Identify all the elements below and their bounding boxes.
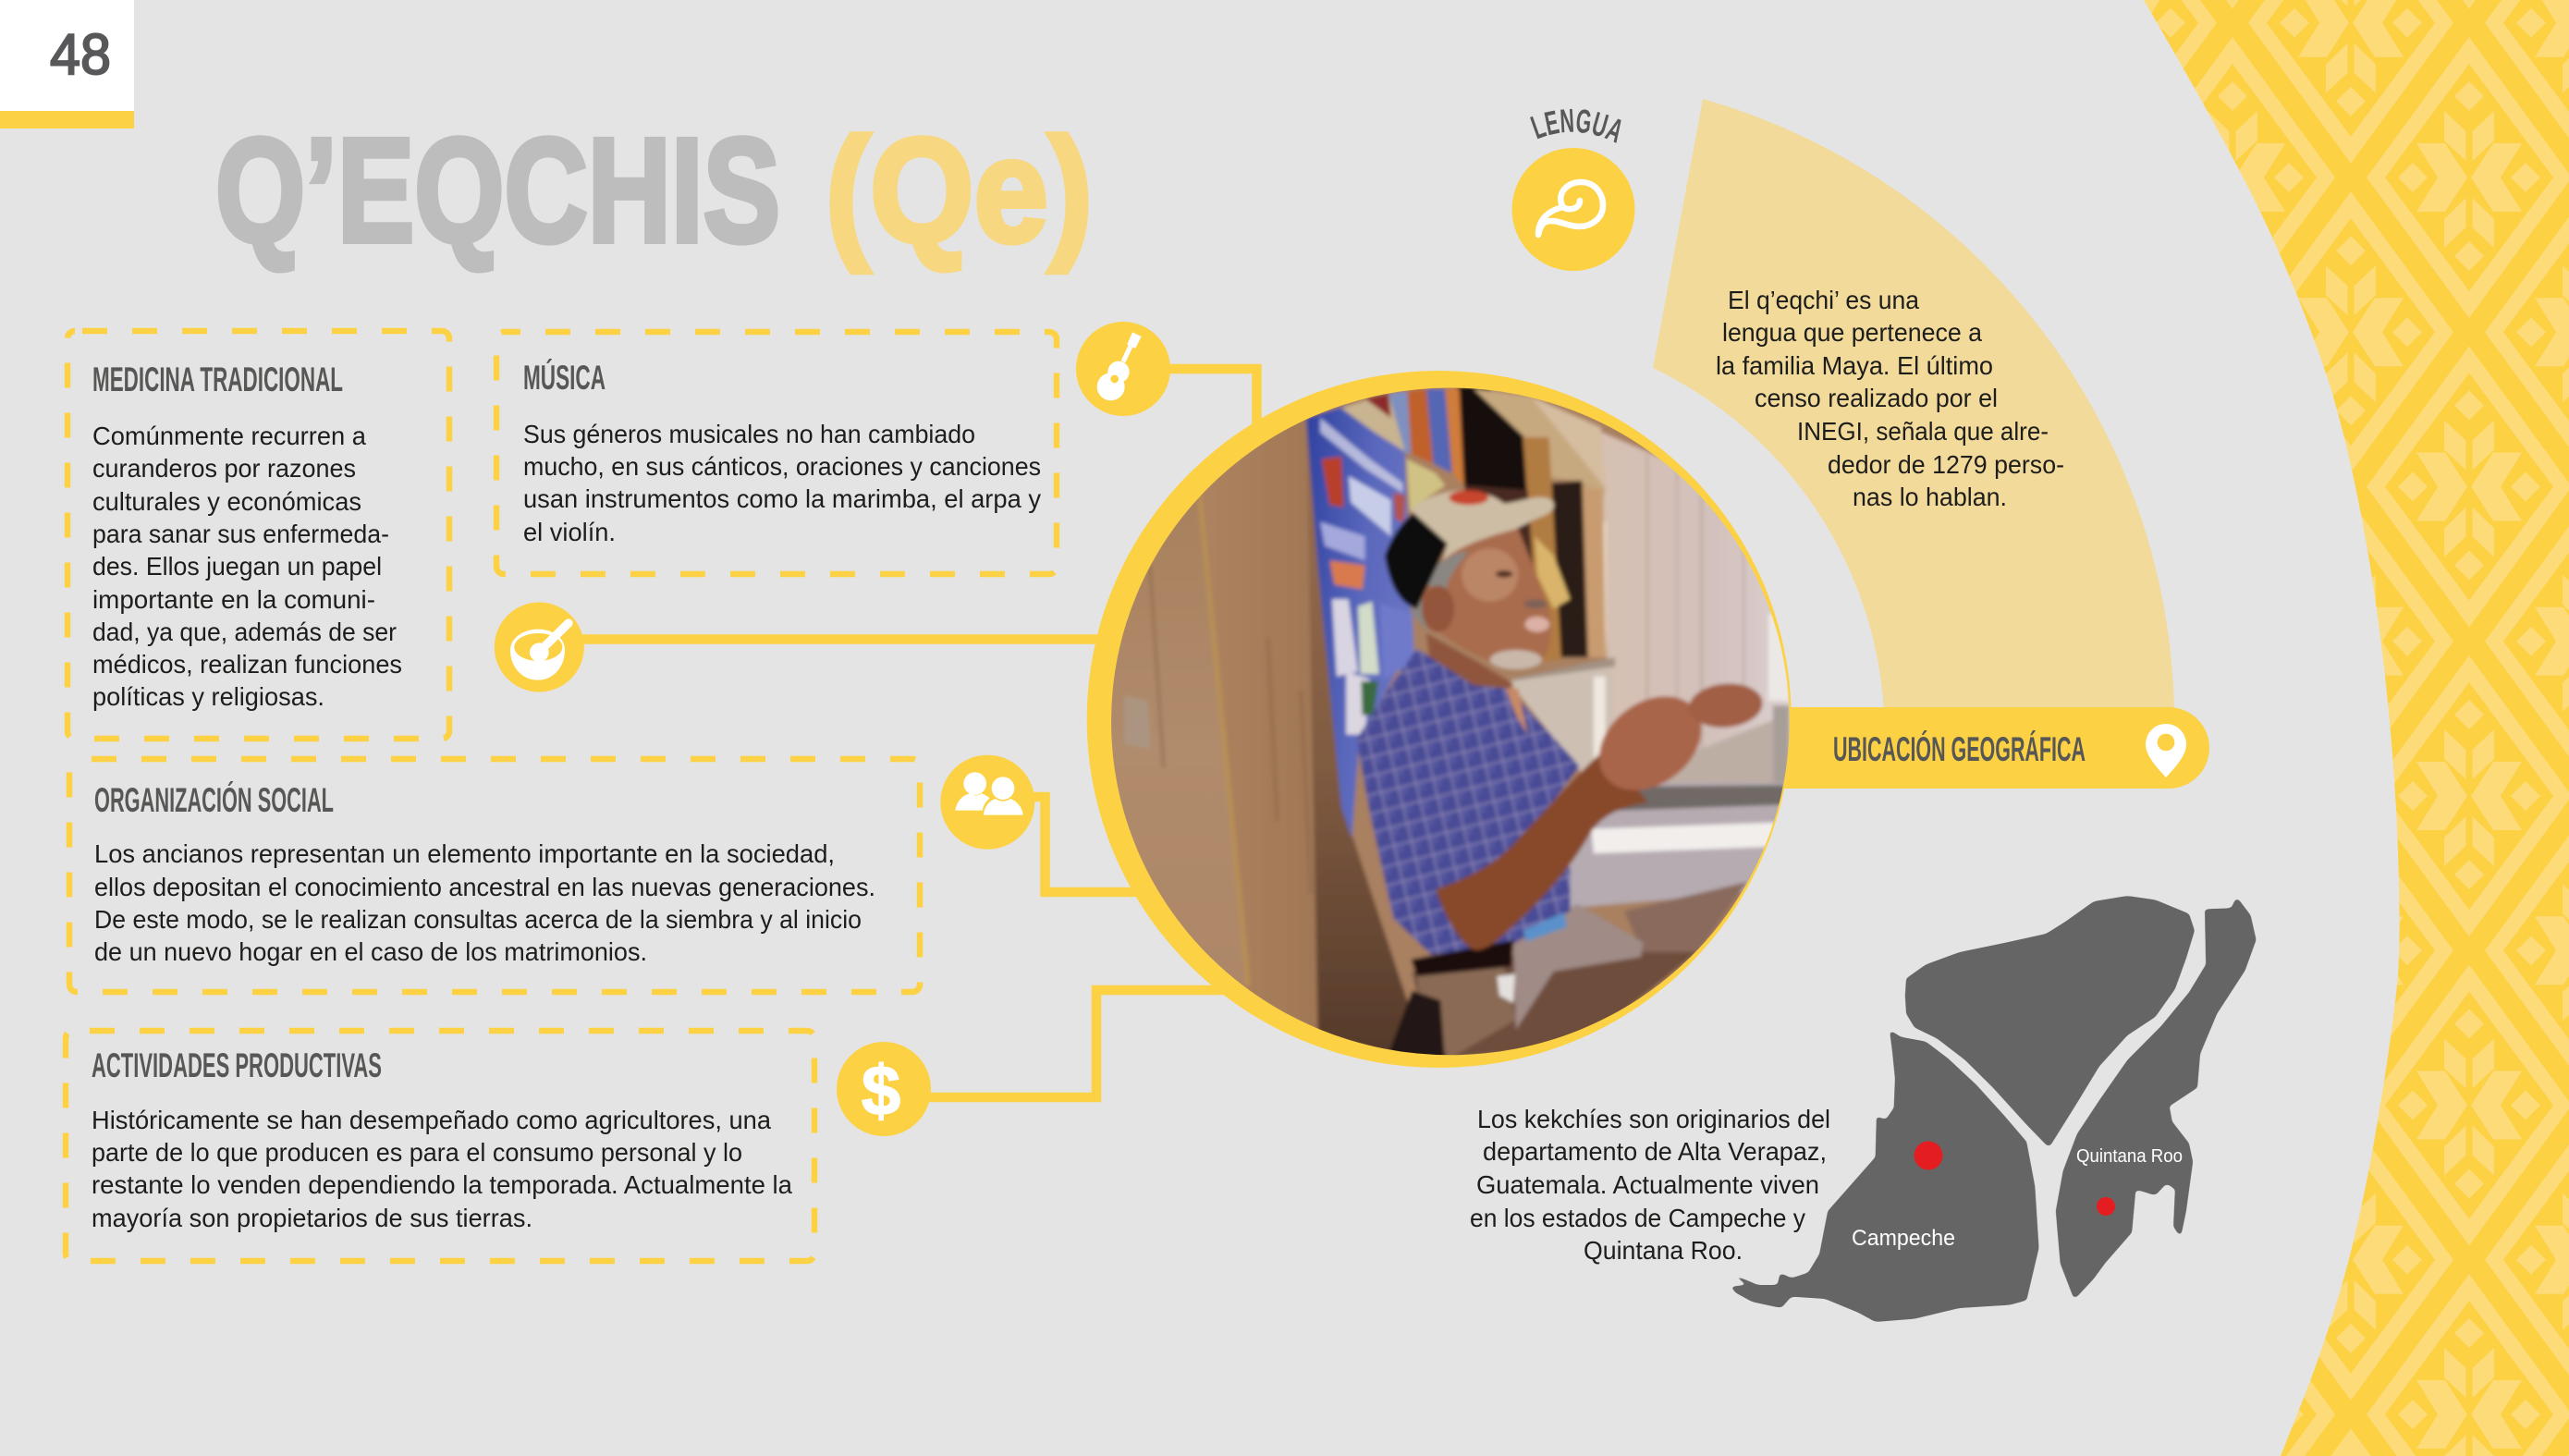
photo: elder speaking in front of a wooden wall	[1092, 372, 1808, 1073]
text block: origen: Los kekchíes son originarios del	[1477, 1105, 1830, 1133]
text block: medicina: culturales y económicas	[92, 487, 361, 516]
icon: dollar	[837, 1042, 931, 1136]
text block: actividades: Históricamente se han desempeñado como agricultores, una	[92, 1106, 771, 1134]
label bar: ubicación geográfica	[1756, 707, 2209, 789]
text block: organización	[94, 839, 875, 966]
connector: actividades	[924, 990, 1239, 1097]
panel: música	[496, 332, 1057, 574]
icon: mortar	[495, 603, 584, 691]
text block: música: el violín.	[523, 518, 616, 546]
page number tab	[0, 0, 134, 128]
text block: medicina: para sanar sus enfermeda-	[92, 520, 389, 548]
text block: lengua: la familia Maya. El último	[1716, 351, 1993, 380]
map label: Campeche: Campeche	[1852, 1226, 1955, 1251]
map marker: Quintana Roo	[2097, 1197, 2115, 1216]
map marker: Campeche	[1914, 1141, 1943, 1170]
text block: actividades: parte de lo que producen es para el consumo personal y lo	[92, 1138, 742, 1167]
text block: organización: De este modo, se le realizan consultas acerca de la siembra y al inicio	[94, 905, 862, 934]
text block: lengua: INEGI, señala que alre-	[1797, 417, 2049, 446]
text block: medicina: dad, ya que, además de ser	[92, 618, 397, 646]
text block: origen: Quintana Roo.	[1584, 1236, 1743, 1265]
heading: organización social: ORGANIZACIÓN SOCIAL	[94, 780, 334, 819]
text block: origen: Guatemala. Actualmente viven	[1476, 1170, 1819, 1199]
text block: medicina: políticas y religiosas.	[92, 682, 324, 711]
connector: medicina	[582, 634, 1109, 644]
text block: lengua: El q’eqchi’ es una	[1728, 286, 1919, 314]
text block: medicina: Comúnmente recurren a	[92, 422, 366, 450]
text block: lengua: censo realizado por el	[1755, 384, 1998, 412]
text block: lengua: dedor de 1279 perso-	[1828, 450, 2064, 479]
connector: organización	[1031, 797, 1146, 892]
text block: música	[523, 420, 1041, 546]
panel: medicina tradicional	[67, 331, 449, 739]
map: Yucatán, Campeche, Quintana Roo	[1730, 896, 2257, 1322]
icon: dollar: $	[862, 1052, 900, 1131]
text block: organización: ellos depositan el conocimiento ancestral en las nuevas generaciones.	[94, 873, 875, 901]
text block: medicina: des. Ellos juegan un papel	[92, 552, 382, 581]
text block: música: Sus géneros musicales no han cambiado	[523, 420, 975, 448]
patterned yellow right band	[2034, 0, 2569, 1456]
text block: lengua: nas lo hablan.	[1853, 483, 2007, 511]
icon: guitar	[1076, 322, 1170, 416]
heading: actividades productivas: ACTIVIDADES PRODUCTIVAS	[92, 1046, 382, 1084]
text block: actividades: mayoría son propietarios de sus tierras.	[92, 1204, 532, 1232]
text block: medicina	[92, 422, 402, 711]
heading: lengua: LENGUA	[1530, 109, 1621, 143]
photo ring	[1087, 371, 1792, 1068]
text block: organización: de un nuevo hogar en el caso de los matrimonios.	[94, 937, 647, 966]
icon: lengua	[1512, 148, 1634, 271]
text block: medicina: importante en la comuni-	[92, 585, 375, 614]
panel: lengua fan	[1653, 99, 2174, 712]
icon: people	[940, 755, 1034, 850]
text block: origen: en los estados de Campeche y	[1470, 1204, 1805, 1232]
panel: organización social	[69, 759, 920, 992]
text block: medicina: curanderos por razones	[92, 454, 356, 483]
label bar: ubicación geográfica: UBICACIÓN GEOGRÁFICA	[1833, 729, 2086, 768]
text block: actividades: restante lo venden dependiendo la temporada. Actualmente la	[92, 1170, 792, 1199]
panel: actividades productivas	[66, 1031, 814, 1261]
text block: música: mucho, en sus cánticos, oraciones y canciones	[523, 452, 1041, 481]
heading: música: MÚSICA	[523, 358, 606, 397]
text block: actividades	[92, 1106, 792, 1232]
text block: origen	[1470, 1105, 1830, 1265]
title: (Qe)	[826, 107, 1093, 273]
icon: location pin	[2146, 724, 2186, 777]
page number tab: 48	[50, 23, 111, 87]
text block: lengua	[1716, 286, 2064, 511]
title: Q’EQCHIS	[215, 107, 780, 273]
text block: música: usan instrumentos como la marimba, el arpa y	[523, 484, 1041, 513]
map label: Quintana Roo: Quintana Roo	[2076, 1146, 2183, 1167]
text block: medicina: médicos, realizan funciones	[92, 650, 402, 679]
text block: lengua: lengua que pertenece a	[1722, 318, 1982, 347]
connector: música	[1165, 369, 1257, 444]
heading: medicina tradicional: MEDICINA TRADICIONAL	[92, 361, 343, 398]
text block: origen: departamento de Alta Verapaz,	[1483, 1137, 1827, 1166]
text block: organización: Los ancianos representan un elemento importante en la sociedad,	[94, 839, 835, 868]
